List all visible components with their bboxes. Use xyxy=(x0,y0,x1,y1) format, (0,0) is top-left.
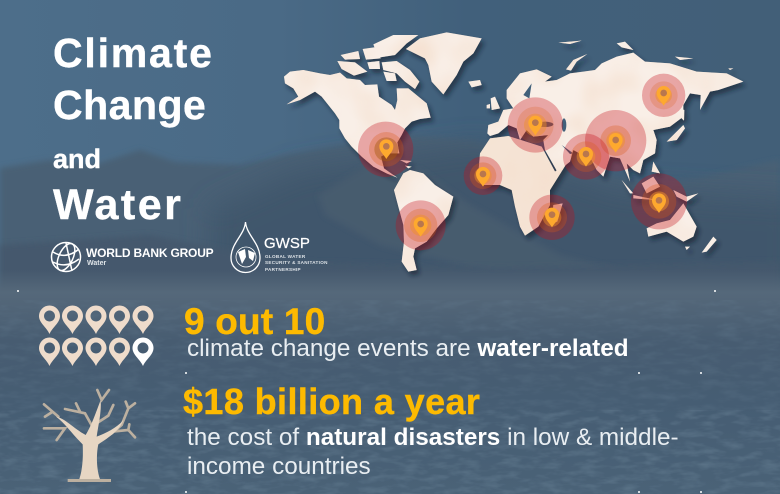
logo: GWSP: GWSP xyxy=(264,235,310,252)
logo: World Bank Group xyxy=(50,242,214,272)
hotspot: Mediterranean xyxy=(508,97,563,153)
title: and xyxy=(53,144,101,174)
hotspot: South Asia xyxy=(563,134,609,180)
inland seas xyxy=(523,83,573,154)
hotspot: Russia Far East xyxy=(642,74,685,117)
icon: bare tree xyxy=(44,390,135,482)
stat: 9 out of 10: climate change events are water-related xyxy=(187,335,629,362)
hotspot: Southeast Asia xyxy=(631,173,687,229)
hotspot: Southern Africa xyxy=(529,195,575,240)
title: Water xyxy=(53,181,183,229)
stat: 9 out of 10: 9 out 10 xyxy=(184,301,325,342)
logo: World Bank Group: Water xyxy=(87,260,106,267)
title xyxy=(52,30,214,229)
stat: 18 billion a year: the cost of natural disasters in low & middle- xyxy=(187,424,679,451)
logo: GWSP xyxy=(230,222,328,274)
continents xyxy=(284,32,743,272)
stat: 18 billion a year: income countries xyxy=(187,453,371,480)
title: Climate xyxy=(53,30,214,76)
stat: 18 billion a year: $18 billion a year xyxy=(183,381,480,422)
logo: GWSP: PARTNERSHIP xyxy=(265,267,301,272)
logo: GWSP: GLOBAL WATER xyxy=(265,254,305,259)
hotspot: West Africa xyxy=(464,156,502,195)
hotspot: South America xyxy=(396,200,446,250)
map pins xyxy=(379,86,671,237)
logo: GWSP: SECURITY & SANITATION xyxy=(265,260,328,265)
stat: 18 billion a year xyxy=(183,381,679,480)
hotspot: East Asia xyxy=(585,110,646,171)
stat: 9 out of 10 xyxy=(184,301,629,362)
title: Change xyxy=(53,82,206,128)
logo: World Bank Group: WORLD BANK GROUP xyxy=(86,246,213,260)
hotspot: Mexico xyxy=(358,122,413,177)
